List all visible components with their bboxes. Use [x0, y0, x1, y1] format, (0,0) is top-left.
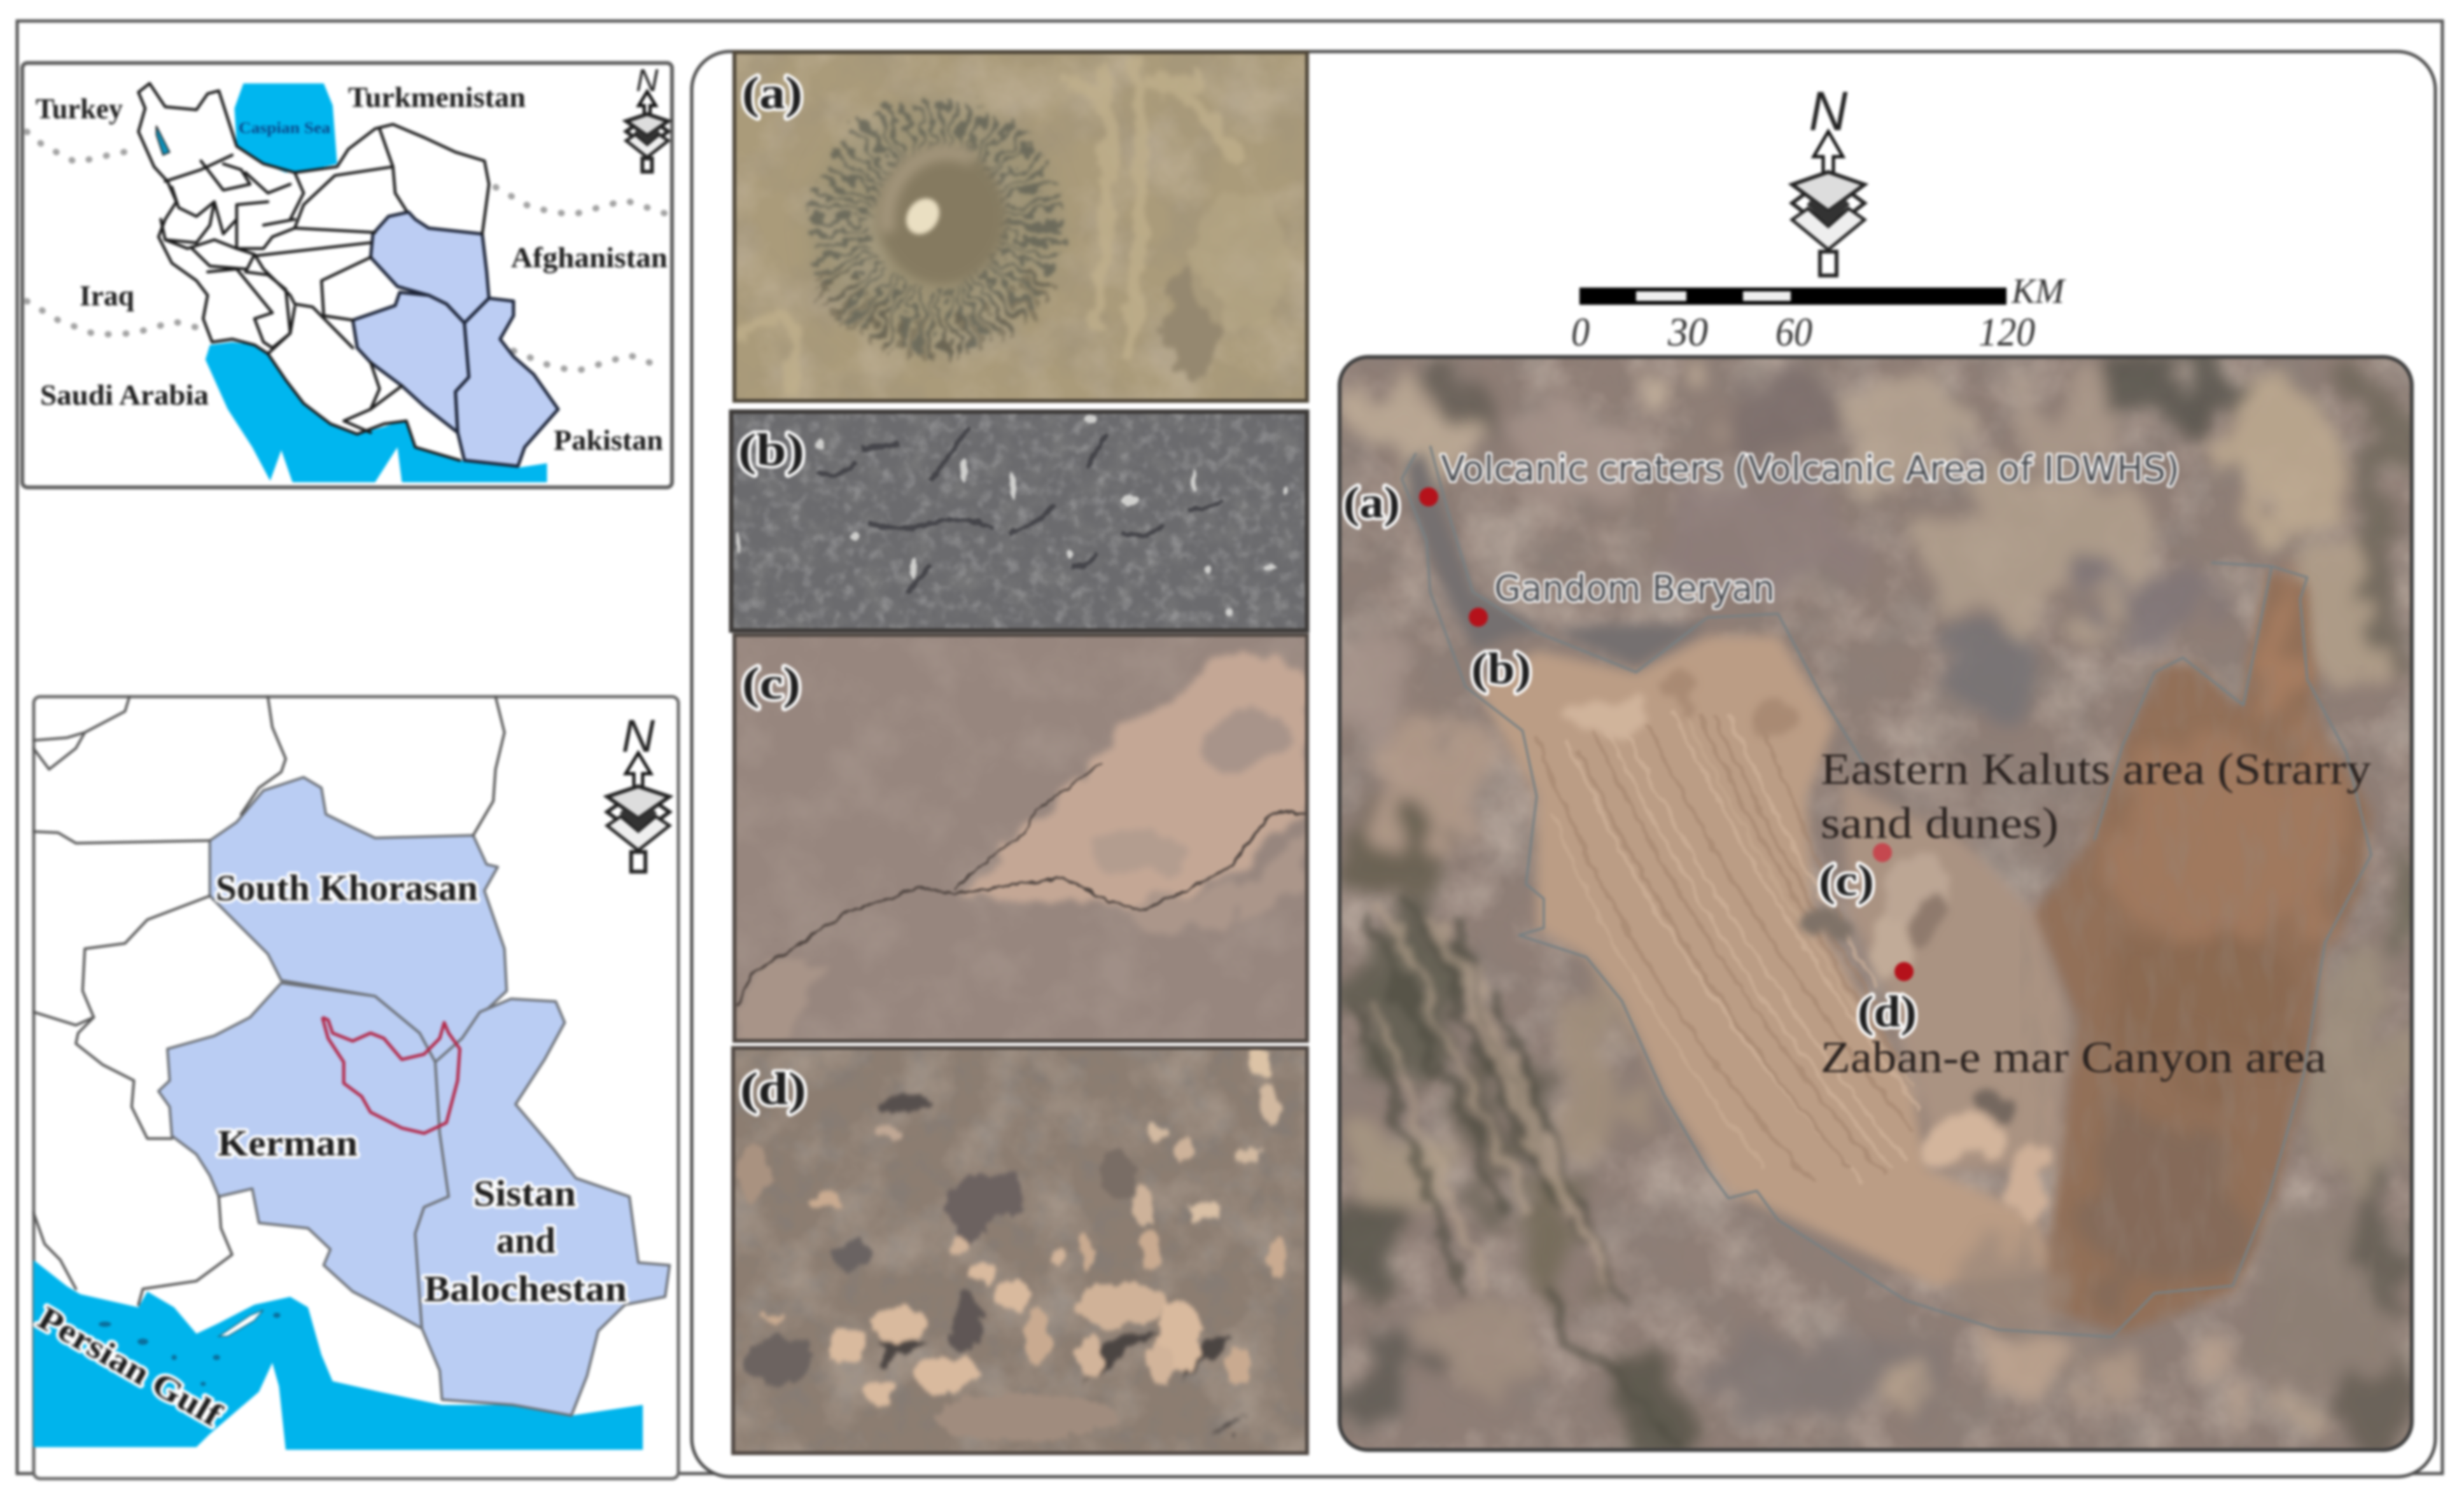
scale bar: 120: [1978, 309, 2035, 354]
photo label (b): (b): [738, 424, 804, 475]
photo label (d): (d): [740, 1063, 806, 1114]
label: Volcanic craters: Volcanic craters (Volcanic Area of IDWHS): [1441, 449, 2180, 490]
map border: [1340, 357, 2412, 1450]
site marker (c): [1873, 843, 1892, 862]
photo (a) border: [734, 52, 1307, 401]
panel: provinces map: [32, 697, 678, 1479]
country label: Saudi Arabia: Saudi Arabia: [40, 379, 209, 411]
site marker (b): [1469, 608, 1488, 627]
site marker (a): [1419, 487, 1438, 506]
panel frame: satellite section: [692, 52, 2435, 1477]
scale bar: 0: [1571, 309, 1590, 354]
photo label (c): (c): [742, 658, 801, 709]
country label: Iraq: Iraq: [80, 279, 134, 312]
label: Eastern Kaluts area: sand dunes): [1821, 799, 2059, 848]
icon: north arrow medium: [607, 711, 669, 872]
photo (c) border: [734, 635, 1307, 1041]
site label (d): (d): [1858, 987, 1917, 1036]
provinces map drawing: [34, 697, 669, 1450]
country label: Afghanistan: Afghanistan: [511, 241, 668, 274]
country label: Pakistan: Pakistan: [554, 424, 663, 456]
label: Eastern Kaluts area: Eastern Kaluts area (Strarry: [1821, 745, 2371, 794]
icon: north arrow small: [626, 64, 668, 172]
panel: main satellite map: [1324, 351, 2418, 1450]
photo (b) border: [731, 412, 1307, 631]
scale bar: 60: [1775, 309, 1812, 354]
scale bar: KM: [2011, 272, 2066, 311]
Iran map drawing: [27, 83, 666, 482]
province label: Sistan and Balochestan: [424, 1173, 627, 1309]
photo label (a): (a): [742, 67, 802, 118]
label: Eastern Kaluts area: [1821, 745, 2371, 848]
photo (d): star sand dunes: [733, 1048, 1307, 1453]
photo (a): volcanic crater: [734, 52, 1307, 401]
scale bar: 30: [1667, 309, 1708, 354]
label: Zaban-e mar Canyon area: Zaban-e mar Canyon area: [1821, 1033, 2327, 1082]
photo (b): Gandom Beryan lava surface: [731, 412, 1307, 631]
photo (c): Eastern Kaluts: [734, 635, 1307, 1041]
icon: north arrow large: [1792, 80, 1865, 275]
water label: Caspian Sea: Caspian Sea: [239, 120, 331, 137]
province label: Sistan and Balochestan: Sistan: [473, 1173, 576, 1214]
panel: Iran locator map: [22, 63, 672, 487]
water label: Persian Gulf: Persian Gulf: [32, 1300, 228, 1434]
label: Gandom Beryan: Gandom Beryan: [1494, 568, 1775, 610]
site marker (d): [1894, 962, 1914, 981]
province label: Kerman: Kerman: [218, 1122, 358, 1164]
scale bar: [1571, 272, 2066, 354]
country label: Turkey: Turkey: [36, 92, 123, 125]
site label (c): (c): [1819, 856, 1874, 905]
satellite imagery: [1324, 351, 2418, 1450]
province label: Sistan and Balochestan: Balochestan: [424, 1268, 627, 1309]
site label (b): (b): [1471, 645, 1531, 694]
country label: Turkmenistan: Turkmenistan: [348, 81, 526, 113]
province label: South Khorasan: South Khorasan: [216, 867, 478, 909]
photo (d) border: [733, 1048, 1307, 1453]
province label: Sistan and Balochestan: and: [496, 1220, 556, 1261]
site label (a): (a): [1343, 478, 1400, 527]
